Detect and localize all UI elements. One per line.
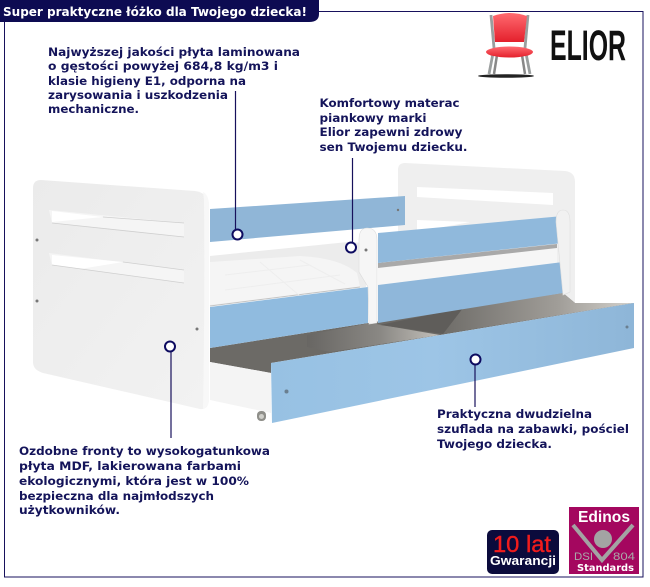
- callout text: [437, 407, 629, 451]
- callout: laminated board: [48, 45, 300, 240]
- right headboard: [398, 163, 575, 303]
- badge: 10 year warranty: Gwarancji: [490, 554, 556, 568]
- badge: Edinos standards: [569, 507, 639, 574]
- badge: 10 year warranty: [487, 530, 559, 574]
- title banner: Super praktyczne łóżko dla Twojego dziecka!: [3, 4, 307, 19]
- callout text: sen Twojemu dziecku.: [320, 140, 468, 154]
- callout text: Twojego dziecka.: [437, 437, 552, 451]
- drawer wheel: [257, 411, 266, 421]
- left front blue rail: [210, 287, 368, 348]
- callout text: szuflada na zabawki, pościel: [437, 422, 629, 436]
- brand logo: Elior: [478, 13, 626, 78]
- callout text: Najwyższej jakości płyta laminowana: [48, 45, 300, 59]
- badge: Edinos standards: Standards: [577, 563, 634, 574]
- left headboard: [33, 180, 209, 409]
- callout text: piankowy marki: [320, 111, 426, 125]
- callout text: Ozdobne fronty to wysokogatunkowa: [19, 444, 270, 458]
- drawer side: [210, 362, 271, 413]
- callout text: użytkowników.: [19, 503, 120, 517]
- callout text: ekologicznymi, która jest w 100%: [19, 474, 250, 488]
- badge: Edinos standards: 804: [613, 551, 635, 563]
- callout: decorative fronts: [19, 342, 270, 517]
- icon: red chair: [478, 13, 534, 78]
- callout text: Elior zapewni zdrowy: [320, 125, 463, 139]
- callout: mattress: [320, 96, 468, 252]
- callout text: [19, 444, 270, 517]
- right mattress: [378, 244, 557, 285]
- callout text: klasie higieny E1, odporna na: [48, 74, 246, 88]
- leader line and marker: [232, 91, 242, 240]
- callout text: o gęstości powyżej 684,8 kg/m3 i: [48, 59, 278, 73]
- drawer front: [271, 303, 634, 423]
- callout text: mechaniczne.: [48, 102, 139, 116]
- right upper blue rail: [378, 216, 563, 263]
- callout text: zarysowania i uszkodzenia: [48, 88, 228, 102]
- leader line and marker: [470, 354, 480, 407]
- leader line and marker: [346, 158, 356, 252]
- callout text: [48, 45, 300, 116]
- right post: [556, 210, 570, 295]
- headboard lower slot: [49, 253, 184, 283]
- badge: 10 year warranty: 10 lat: [493, 531, 552, 557]
- callout text: płyta MDF, lakierowana farbami: [19, 459, 241, 473]
- badge: Edinos standards: DSI: [574, 551, 593, 563]
- drawer interior: [210, 293, 634, 373]
- headboard upper slot: [49, 210, 184, 237]
- mattress: [210, 242, 366, 306]
- callout: drawer: [437, 354, 629, 451]
- leader line and marker: [165, 342, 175, 438]
- callout text: Praktyczna dwudzielna: [437, 407, 592, 421]
- title banner: [0, 0, 319, 22]
- back blue rail: [210, 196, 405, 242]
- middle post: [359, 228, 377, 324]
- badge: Edinos standards: Edinos: [578, 509, 630, 526]
- right lower blue rail: [378, 262, 563, 323]
- callout text: Komfortowy materac: [320, 96, 460, 110]
- callout text: bezpieczna dla najmłodszych: [19, 489, 214, 503]
- callout text: [320, 96, 468, 154]
- bed illustration: [33, 163, 634, 423]
